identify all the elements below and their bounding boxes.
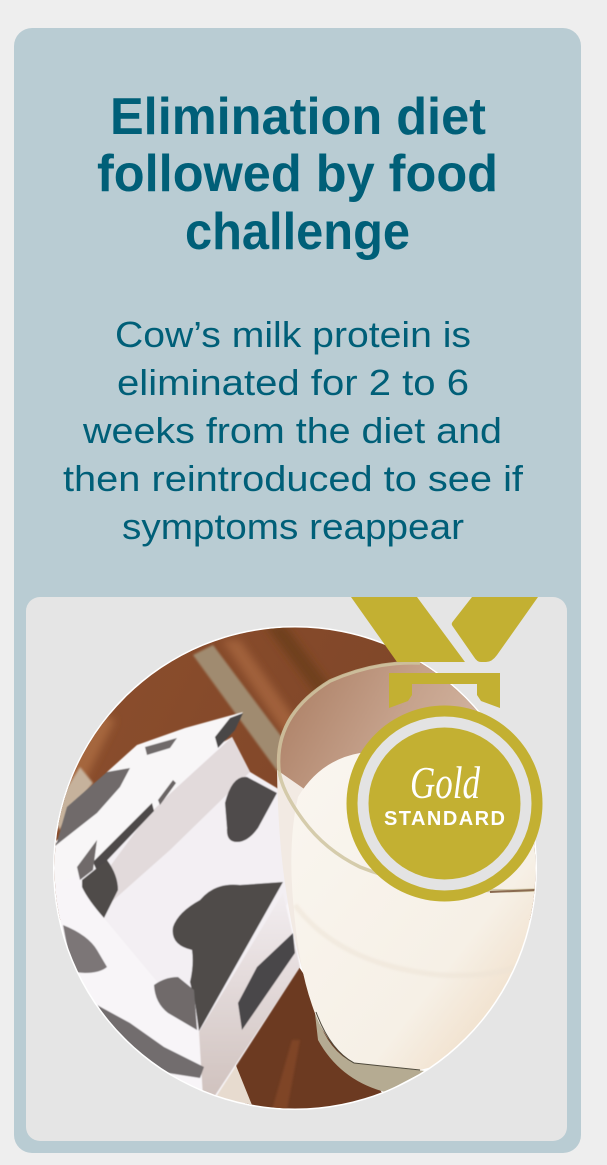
body text: symptoms reappear bbox=[122, 506, 464, 547]
title bbox=[97, 88, 498, 261]
glass rim bbox=[279, 663, 536, 891]
body text: then reintroduced to see if bbox=[63, 458, 524, 499]
cow spots bbox=[50, 713, 295, 1078]
glass lower wall bbox=[277, 770, 304, 978]
medal label: Gold bbox=[410, 757, 481, 808]
medal label: STANDARD bbox=[384, 808, 505, 830]
photo: milk carton and glass of milk bbox=[40, 620, 540, 1120]
carton side face bbox=[199, 893, 300, 1097]
medal disc bbox=[346, 706, 542, 902]
glass of milk bbox=[277, 662, 540, 1092]
carton top flap bbox=[80, 712, 244, 827]
medal label bbox=[384, 757, 505, 830]
body text: weeks from the diet and bbox=[82, 410, 502, 451]
carton base fill bbox=[55, 737, 300, 1096]
panel: image area bbox=[26, 597, 567, 1141]
glass upper wall bbox=[277, 662, 540, 900]
milk bbox=[291, 753, 540, 1070]
carton inner face bbox=[251, 772, 277, 788]
medal clasp bbox=[389, 673, 500, 708]
icon: gold standard medal bbox=[346, 597, 542, 902]
medal ribbon bbox=[351, 597, 538, 662]
body text: Cow’s milk protein is bbox=[115, 314, 471, 355]
body text: eliminated for 2 to 6 bbox=[117, 362, 469, 403]
milk carton bbox=[40, 712, 300, 1115]
title: followed by food bbox=[97, 145, 498, 203]
photo outline bbox=[53, 626, 537, 1110]
wood foreground bbox=[214, 967, 382, 1108]
title: Elimination diet bbox=[110, 88, 486, 146]
wooden table bbox=[50, 620, 540, 920]
body text bbox=[63, 314, 524, 547]
title: challenge bbox=[185, 203, 410, 261]
glass base bbox=[314, 1012, 424, 1092]
